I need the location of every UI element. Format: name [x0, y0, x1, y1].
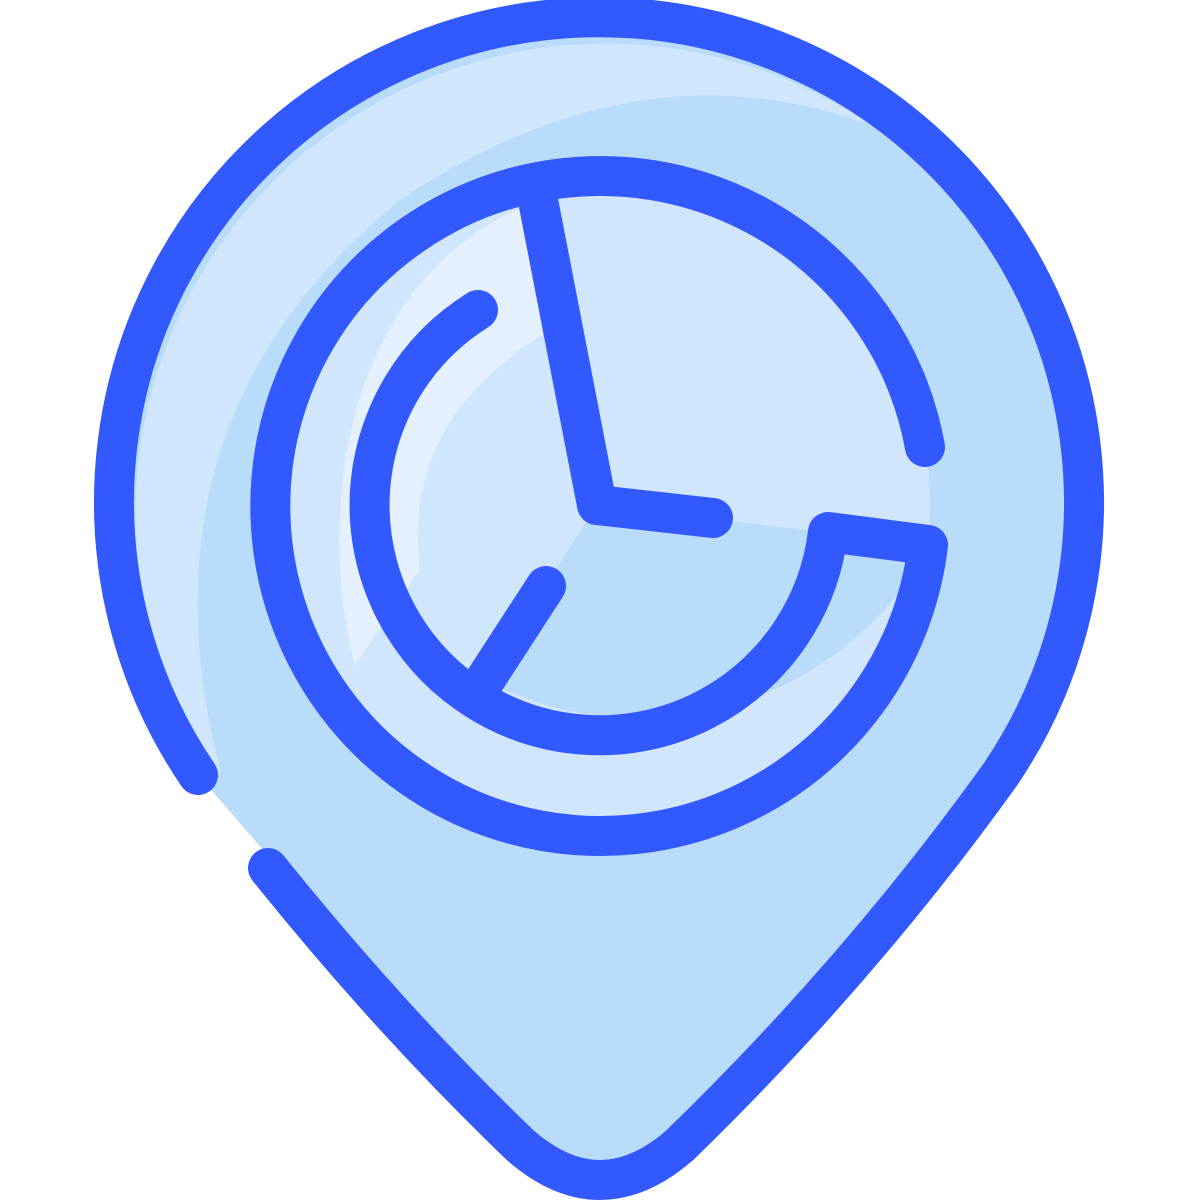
pin fill	[114, 17, 1084, 1180]
pin outline	[114, 17, 1084, 1180]
pie chart outline	[270, 176, 928, 836]
inner chart fill	[270, 175, 930, 835]
